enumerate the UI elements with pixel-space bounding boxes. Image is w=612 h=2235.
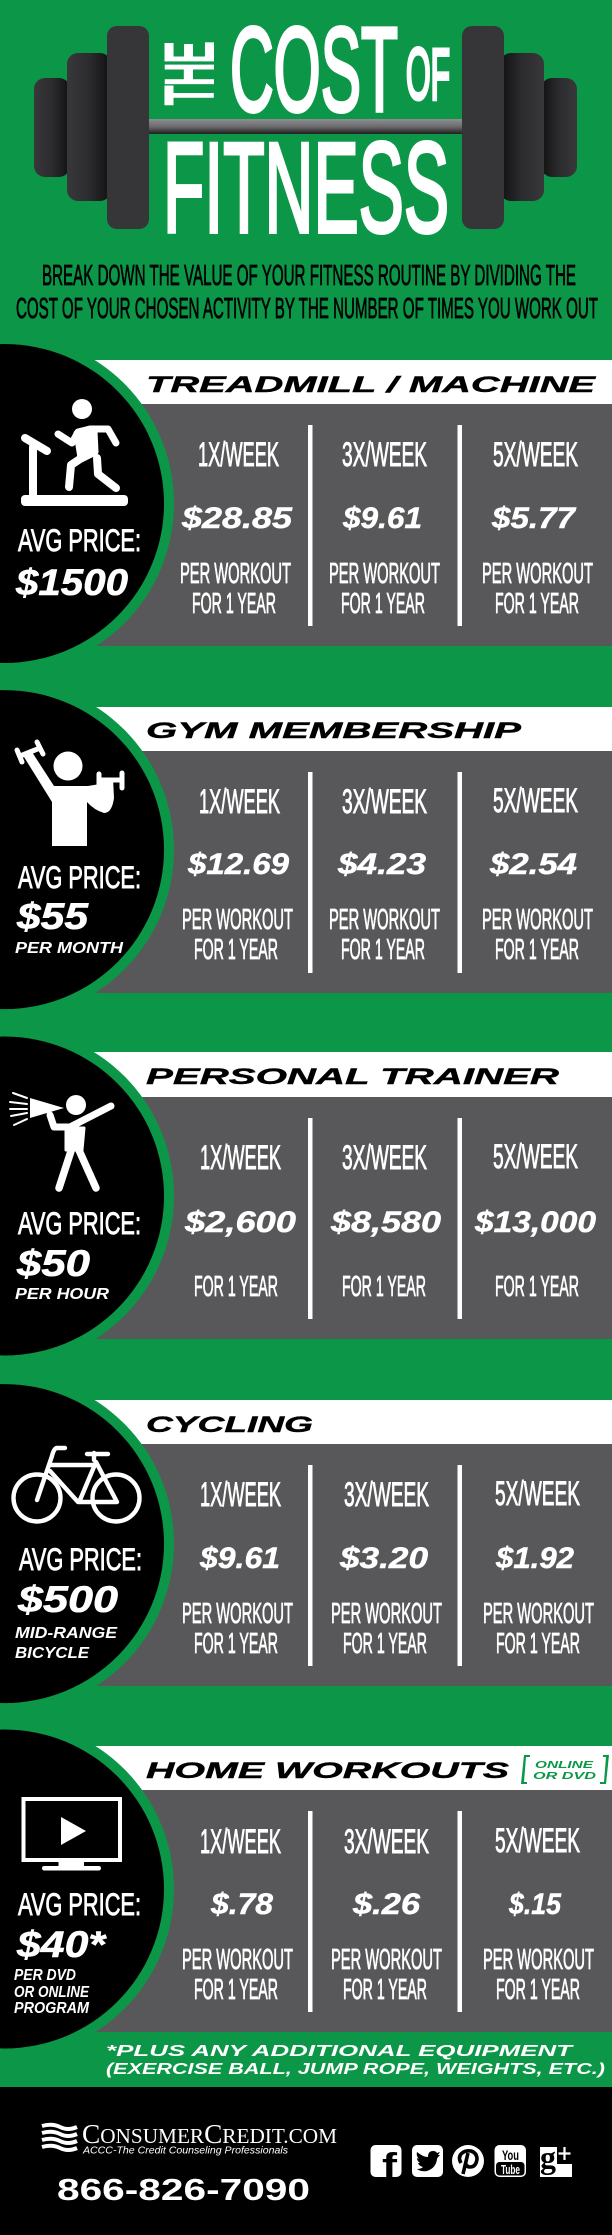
average price: cycling: AVG PRICE: bbox=[19, 1541, 142, 1577]
column: 1x/week: 1X/WEEK bbox=[200, 1823, 281, 1861]
phone number: 866-826-7090 bbox=[57, 2172, 310, 2207]
average price: gym: AVG PRICE: bbox=[18, 859, 141, 895]
column: 3x/week: PER WORKOUT bbox=[329, 558, 440, 590]
average price: home workouts: PROGRAM bbox=[14, 2000, 90, 2017]
average price: cycling: MID-RANGE bbox=[15, 1625, 118, 1642]
icon: youtube: Tube bbox=[501, 2162, 520, 2177]
column: 5x/week: $2.54 bbox=[489, 848, 577, 881]
average price: home workouts: PER DVD bbox=[14, 1967, 76, 1984]
column: 1x/week: $2,600 bbox=[184, 1206, 296, 1239]
heading: personal trainer: PERSONAL TRAINER bbox=[146, 1064, 559, 1089]
column: 1x/week: FOR 1 YEAR bbox=[194, 1628, 278, 1660]
column: 1x/week bbox=[180, 436, 294, 620]
column: 3x/week bbox=[331, 1823, 442, 2006]
average price: treadmill: $1500 bbox=[15, 562, 128, 603]
average price: home workouts: AVG PRICE: bbox=[18, 1886, 141, 1922]
column: 1x/week: FOR 1 YEAR bbox=[194, 934, 278, 966]
average price: trainer bbox=[15, 1205, 141, 1303]
column: 5x/week bbox=[482, 436, 593, 620]
heading: treadmill / machine: TREADMILL / MACHINE bbox=[146, 372, 597, 397]
column: 3x/week: 3X/WEEK bbox=[342, 436, 427, 474]
icon: youtube: You bbox=[502, 2147, 519, 2163]
icon: facebook bbox=[370, 2145, 402, 2185]
average price: cycling bbox=[15, 1541, 142, 1662]
average price: cycling: BICYCLE bbox=[15, 1645, 90, 1662]
icon: google plus: g bbox=[540, 2139, 556, 2175]
column: 1x/week bbox=[182, 1476, 293, 1660]
column: 3x/week: 3X/WEEK bbox=[342, 1139, 427, 1177]
text: OF bbox=[406, 35, 450, 115]
average price: gym bbox=[15, 859, 141, 957]
label: online or dvd bbox=[521, 1755, 609, 1784]
logo: wordmark: CONSUMERCREDIT.COM bbox=[82, 2119, 337, 2149]
column: 1x/week: $28.85 bbox=[181, 502, 294, 535]
icon: twitter bbox=[412, 2145, 443, 2177]
column: 3x/week bbox=[331, 1476, 442, 1660]
column: 1x/week: 1X/WEEK bbox=[198, 436, 279, 474]
intro text bbox=[16, 260, 598, 325]
column: 1x/week: PER WORKOUT bbox=[182, 904, 293, 936]
label: online or dvd: ONLINE bbox=[535, 1760, 594, 1771]
heading: home workouts: HOME WORKOUTS bbox=[146, 1758, 510, 1783]
logo: waves bbox=[42, 2125, 77, 2150]
icon: google plus bbox=[540, 2139, 572, 2177]
icon: pinterest bbox=[452, 2145, 484, 2177]
column: 1x/week: $12.69 bbox=[187, 848, 289, 881]
footnote bbox=[106, 2043, 605, 2078]
average price: home workouts: OR ONLINE bbox=[14, 1984, 90, 2001]
average price: gym: PER MONTH bbox=[15, 940, 124, 957]
column: 1x/week: PER WORKOUT bbox=[180, 558, 291, 590]
column: 1x/week: FOR 1 YEAR bbox=[192, 588, 276, 620]
panel: home workouts bbox=[0, 1720, 612, 2058]
average price: home workouts bbox=[14, 1886, 141, 2017]
average price: home workouts: $40* bbox=[16, 1924, 107, 1965]
logo: tagline: ACCC-The Credit Counseling Professionals bbox=[82, 2146, 288, 2156]
column: 3x/week: FOR 1 YEAR bbox=[343, 1974, 427, 2006]
average price: trainer: $50 bbox=[16, 1243, 90, 1284]
average price: trainer: AVG PRICE: bbox=[18, 1205, 141, 1241]
column: 1x/week: $.78 bbox=[210, 1888, 273, 1921]
column: 1x/week: FOR 1 YEAR bbox=[194, 1271, 278, 1303]
footnote: *PLUS ANY ADDITIONAL EQUIPMENT bbox=[106, 2043, 574, 2060]
average price: trainer: PER HOUR bbox=[15, 1286, 109, 1303]
title bbox=[152, 3, 450, 260]
average price: treadmill: AVG PRICE: bbox=[18, 522, 141, 558]
icon: person lifting dumbbells bbox=[17, 742, 122, 846]
column: 3x/week: PER WORKOUT bbox=[329, 904, 440, 936]
average price: gym: $55 bbox=[16, 896, 90, 937]
column: 1x/week bbox=[182, 783, 293, 966]
column: 3x/week: FOR 1 YEAR bbox=[341, 934, 425, 966]
average price: cycling: $500 bbox=[17, 1579, 119, 1620]
column: 3x/week: $.26 bbox=[352, 1888, 420, 1921]
icon: video screen bbox=[24, 1799, 120, 1870]
column: 3x/week: FOR 1 YEAR bbox=[341, 588, 425, 620]
column: 3x/week: 3X/WEEK bbox=[344, 1476, 429, 1514]
heading: gym membership: GYM MEMBERSHIP bbox=[146, 718, 522, 743]
column: 3x/week: $3.20 bbox=[339, 1542, 428, 1575]
column: 5x/week: $5.77 bbox=[491, 502, 576, 535]
icon: trainer with megaphone bbox=[10, 1093, 111, 1188]
column: 3x/week bbox=[329, 436, 440, 620]
column: 1x/week: PER WORKOUT bbox=[182, 1944, 293, 1976]
column: 3x/week: PER WORKOUT bbox=[331, 1598, 442, 1630]
icon: barbell bbox=[34, 26, 577, 229]
column: 3x/week: 3X/WEEK bbox=[342, 783, 427, 821]
column: 1x/week: FOR 1 YEAR bbox=[194, 1974, 278, 2006]
label: online or dvd: OR DVD bbox=[533, 1771, 596, 1782]
icon: treadmill runner bbox=[21, 399, 128, 506]
average price: treadmill bbox=[15, 522, 141, 603]
panel: gym membership bbox=[0, 680, 612, 1019]
column: 5x/week: $1.92 bbox=[495, 1542, 574, 1575]
icon: bicycle bbox=[14, 1448, 140, 1522]
column: 3x/week: 3X/WEEK bbox=[344, 1823, 429, 1861]
column: 5x/week bbox=[482, 782, 593, 966]
title: COST bbox=[230, 3, 398, 137]
column: 3x/week bbox=[329, 783, 440, 966]
column: 1x/week: 1X/WEEK bbox=[200, 1476, 281, 1514]
column: 3x/week: FOR 1 YEAR bbox=[343, 1628, 427, 1660]
column: 3x/week: $9.61 bbox=[342, 502, 422, 535]
panel: treadmill / machine bbox=[0, 334, 612, 673]
column: 5x/week bbox=[483, 1822, 594, 2006]
icon: facebook: f bbox=[382, 2147, 398, 2185]
column: 1x/week bbox=[182, 1823, 293, 2006]
column: 1x/week: $9.61 bbox=[199, 1542, 280, 1575]
icon: youtube bbox=[494, 2145, 526, 2177]
column: 3x/week: $8,580 bbox=[330, 1206, 441, 1239]
panel: cycling bbox=[0, 1374, 612, 1713]
column: 5x/week: $13,000 bbox=[474, 1206, 596, 1239]
column: 3x/week: FOR 1 YEAR bbox=[342, 1271, 426, 1303]
column: 5x/week bbox=[474, 1138, 596, 1303]
column: 5x/week: $.15 bbox=[508, 1888, 562, 1921]
panel: personal trainer bbox=[0, 1026, 612, 1366]
column: 3x/week bbox=[330, 1139, 441, 1303]
footer bbox=[0, 2087, 612, 2235]
column: 3x/week: $4.23 bbox=[337, 848, 426, 881]
column: 3x/week: PER WORKOUT bbox=[331, 1944, 442, 1976]
column: 1x/week: 1X/WEEK bbox=[200, 1139, 281, 1177]
column: 1x/week bbox=[184, 1139, 296, 1303]
footnote: (EXERCISE BALL, JUMP ROPE, WEIGHTS, ETC.) bbox=[106, 2061, 605, 2078]
heading: cycling: CYCLING bbox=[146, 1412, 313, 1437]
column: 5x/week bbox=[483, 1475, 594, 1660]
column: 1x/week: 1X/WEEK bbox=[199, 783, 280, 821]
column: 1x/week: PER WORKOUT bbox=[182, 1598, 293, 1630]
